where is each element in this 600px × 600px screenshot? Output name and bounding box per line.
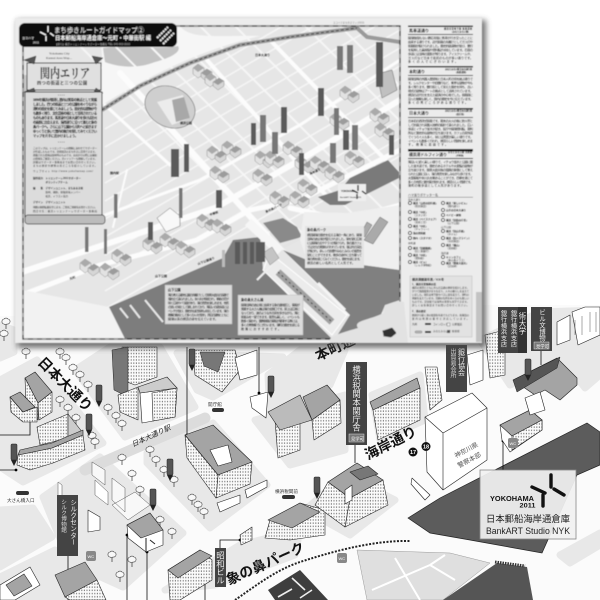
section: 本町通り: 開港当時の外国人居留地と日本人町の境を結ぶ通りで <box>408 76 473 81</box>
callout: 山下公園: 埋め立て造られました。氷川丸が係留され、季節の花が <box>168 296 230 301</box>
building: annex behind corner <box>37 414 83 445</box>
label: 横浜銀行協会: 出貿易会所 <box>449 347 456 379</box>
section: legend list: （関内通り） <box>446 204 461 208</box>
section: 日本大通り: (県庁前) <box>456 112 464 116</box>
sky clouds behind rail <box>100 26 260 105</box>
panel: area map <box>22 0 400 339</box>
panel: tram history box: 凡例 <box>412 322 418 326</box>
English map caption: Yokohama City <box>49 52 70 56</box>
label: 神奈川県警察本部 <box>453 440 483 470</box>
callout: 山下公園: 海の見える都市公園の先駆けとして関東大震災の瓦礫で <box>168 292 229 297</box>
organiser note: このマップは、トリエンナーレの開催にあわせてサポーター <box>33 146 97 150</box>
section: legend list: （県民施設） <box>413 204 428 208</box>
docks <box>268 570 328 600</box>
panel: tram history box: 公衆電話 <box>452 322 463 326</box>
callout: 象の鼻大さん橋: 開港当時の波止場に由来する象の鼻地区と、客船が <box>241 302 301 307</box>
logo: header spokes <box>40 26 54 41</box>
label: 横浜税関本関庁舎: 見学可 <box>351 436 365 442</box>
building: NYK warehouse <box>513 357 577 415</box>
section: legend list: 横浜「旧街の庁舎」 <box>446 218 469 222</box>
intro paragraph: の面影に出会えます。海岸通りに沿って進むと象の <box>33 120 97 124</box>
map ground <box>24 46 25 47</box>
callout: 象の鼻パーク: 象の鼻パーク <box>307 227 326 232</box>
section: legend list: （旧三菱銀行） <box>413 249 431 253</box>
section: legend list: 横浜（旧ハマライン） <box>446 236 471 240</box>
section: legend list: 横浜「旧山手館」 <box>446 229 466 233</box>
section: legend list: 海の資料館 <box>413 231 426 235</box>
callout: YOKOHAMA 2011 BankART Studio NYK <box>480 470 576 539</box>
section: legend list: 横浜「旧館飯館」 <box>413 246 433 250</box>
left water <box>109 237 332 339</box>
intro paragraph <box>33 97 98 138</box>
section: legend list: （記念碑） <box>446 264 459 268</box>
label: シルクセンター シルク博物館: シルク博物館 <box>60 499 67 534</box>
park land <box>300 205 400 270</box>
subheading: route: 日本郵船海岸通倉庫〜元町・中華街駅 編 <box>55 34 152 42</box>
callout: 象の鼻大さん橋: 象の鼻大さん橋 <box>241 297 264 302</box>
panel: street descriptions <box>408 26 474 337</box>
building: tall tower group <box>112 347 177 423</box>
section: 馬車道通り: 街路樹が設けられました。歴史的建造物が並び、銀行 <box>408 43 473 48</box>
area labels: 関内駅 <box>110 170 119 175</box>
section: 山下公園通り: (中華街) <box>456 154 464 158</box>
label: 銀行 横浜支店 <box>498 307 527 353</box>
section: legend list: 横浜「関東大震災」 <box>446 261 469 265</box>
panel: tram history box: いました。現在は地下鉄やバスに姿を変えて、港町の <box>412 292 469 296</box>
organiser note <box>33 146 97 173</box>
building: small silk block <box>58 462 163 552</box>
section: 馬車道通り <box>408 26 473 64</box>
callout: 象の鼻大さん橋 <box>238 295 303 335</box>
panel: title scroll <box>24 56 103 96</box>
logo text: 2011: 2011 <box>520 502 536 510</box>
label: ビル 見学可: ビル文博物館 <box>538 309 545 349</box>
panel: tram history box: 2．港の歴史 <box>412 309 426 313</box>
section: 馬車道通り: を転用した美術館や資料館が点在しています。石畳の <box>408 47 473 52</box>
callout: 象の鼻パーク: では文化の発信も行われています。夜は光の演出 <box>307 244 362 249</box>
credits: 編 集 デザインユニット、まちあるき班 <box>33 186 83 190</box>
section: 本町通り: 様式の建物はアートの拠点として活用されています。 <box>408 88 473 93</box>
building clusters <box>80 64 397 280</box>
building: customs house <box>315 463 430 527</box>
panel: introduction scroll: • • • • <box>58 140 65 144</box>
section: legend list: ハマ巡りポケッター名 <box>408 192 438 197</box>
organiser note: まちの歴史や建物の見どころを紹介しています。 <box>33 164 97 168</box>
subtitle: 四つの街道と三つの公園: 四つの街道と三つの公園 <box>37 80 87 86</box>
route number 17 <box>408 448 418 456</box>
WC tags <box>86 438 518 563</box>
section: legend list: （山下公園） <box>446 221 461 225</box>
small label: 大さん橋入口: 大さん橋入口 <box>7 497 35 504</box>
section: legend list: 横浜「中区」 <box>413 253 428 257</box>
leader lines <box>0 347 541 600</box>
label: 横浜税関本関庁舎: 横浜税関本関庁舎 <box>352 364 362 432</box>
section: 日本大通り: イベントも数多く行われ、横浜らしい景観を楽しめま <box>408 138 473 143</box>
panel: tram history box: みなとみらい線 <box>433 329 451 333</box>
inner water <box>443 563 533 600</box>
scroll roll <box>25 215 105 224</box>
section: legend list: （ホテル） <box>446 232 459 236</box>
guide map sheet <box>15 0 482 343</box>
moored ships <box>120 300 163 322</box>
section: 馬車道通り: 由来する通りです。近代街路の先駆けとしてガス灯や <box>408 39 473 44</box>
section: 山下公園通り <box>408 149 474 188</box>
callout: 象の鼻大さん橋: 街並みを一望できます。夜景も美しく、イベントも <box>241 314 300 319</box>
intro paragraph: 1859年横浜が開港し関内は貿易の拠点として発展 <box>33 97 98 102</box>
credits: ボランティアチーム <box>33 180 68 184</box>
section: 山下公園通り: られた公園に沿い、港の風景を楽しみながら歩けます。 <box>408 171 473 176</box>
section: 本町通り: 横浜の近代化を支えた経済の中心地でした。街路樹に <box>408 92 473 97</box>
BankART mini logo box: YOKOHAMA <box>341 190 355 193</box>
trees <box>0 318 208 582</box>
small label: 横浜税関前 <box>275 488 298 499</box>
building: warehouse annex <box>500 410 542 452</box>
section: 本町通り: 本町通り <box>409 68 425 74</box>
section: 馬車道通り: 横浜市営地下鉄 馬車道駅 <box>444 26 473 30</box>
credits <box>33 176 97 213</box>
section: legend list: ベイビー建物 <box>446 213 462 217</box>
credits: デザイン デザインユニット <box>33 200 66 204</box>
section: legend list: 横浜（ベイスクエア） <box>413 217 438 221</box>
section: legend list: 横浜（ビル） <box>413 260 428 264</box>
streets <box>22 40 400 295</box>
small label: 大さん橋入口 <box>7 491 35 504</box>
building: long office <box>370 367 442 440</box>
callout: 象の鼻パーク: 当時の波止場が復元されました。港を望む広場 <box>307 236 362 241</box>
area labels: 海岸通り <box>308 166 321 176</box>
harbour water <box>408 423 600 553</box>
panel: tram history box: コインロッカー <box>433 322 451 326</box>
English map caption: Kannai Area Map... <box>46 56 72 60</box>
label: 術大学: 術大学 <box>518 312 527 334</box>
section: 日本大通り: して計画され英国人技師の設計で造られました。広い <box>408 122 473 127</box>
name: 日本郵船海岸通倉庫: 日本郵船海岸通倉庫 <box>486 513 570 524</box>
label: 神奈川県警察本部: 警察本部 <box>456 450 483 470</box>
日本大通り駅 band <box>85 418 205 470</box>
WC tags: WC <box>88 554 94 559</box>
label: 昭和ビル: 昭和ビル <box>216 551 226 585</box>
section: 馬車道通り: 多くの人でにぎわいます。 <box>408 58 458 64</box>
intro paragraph: ゆっくりと歩いて関内の魅力を探してみてください <box>33 128 97 134</box>
panel: tram history box: 横浜の港湾とともに歩んだ交通の歴史を紹介します。 <box>412 286 469 290</box>
long park buildings <box>360 217 388 244</box>
section: 本町通り: みなとみらい線 日本大通り駅 <box>445 67 473 71</box>
building: 昭和ビル group <box>168 503 325 600</box>
pins <box>11 349 531 511</box>
title: 関内エリア: 関内エリア <box>40 66 90 81</box>
station label: 日本大通り駅: 日本大通り駅 <box>130 423 173 449</box>
label: 銀行 横浜支店: 銀行横浜支店 <box>510 309 517 348</box>
callout: 象の鼻大さん橋: 数多く開かれ、国際航路の客船が寄港する際には、 <box>241 318 300 323</box>
section: legend list: 横浜「中区」 <box>413 210 428 214</box>
section: legend list <box>408 192 473 268</box>
area labels: 山下公園通り <box>197 255 215 266</box>
section: 本町通り: (馬車道駅) <box>456 70 466 74</box>
section: 本町通り: す。シルクセンターや旧銀行など、重厚な建物が今も <box>408 80 473 85</box>
road label: 海岸通り: 海岸通り <box>362 423 419 463</box>
park <box>357 550 490 600</box>
section: legend list: 山手の日本大通り <box>446 208 467 212</box>
intro paragraph: 港町の歴史を感じてみましょう。歴史的な建物が今 <box>33 106 98 111</box>
panel shadow <box>17 20 486 348</box>
callout: 象の鼻パーク: には開港の丘やテラスが設けられ、象の鼻カフェ <box>307 240 362 245</box>
header bar <box>19 23 177 47</box>
organiser note: 掲載された情報は取材時のものです。お出かけの際には最新 <box>33 153 97 157</box>
section: 馬車道通り: ガス灯など日本で最初のものが多い通りです。 <box>408 55 473 60</box>
small label: 開庁館: 開庁館 <box>208 401 222 408</box>
building: dark ornate block <box>193 350 257 392</box>
callout: 山下公園: 咲く広場やバラ園があり、港の景色を楽しめます。市民 <box>168 300 229 305</box>
logo text: YOKOHAMA: YOKOHAMA <box>490 496 534 503</box>
callout: 山下公園: ベンチが並び、歴史的な記念碑も点在しています。港の <box>168 308 229 313</box>
sheet paper <box>15 18 482 343</box>
area labels <box>69 52 321 281</box>
callout: 象の鼻大さん橋: 多くの見物客でにぎわいます。港町の歴史を感じる <box>241 322 300 327</box>
intro paragraph: 鼻パークへ。さらに山下公園から元町へと続きます <box>33 124 97 129</box>
section: 日本大通り: す。散策に最適です。 <box>408 142 448 146</box>
publisher line: 【発行】横浜トリエンナーレサポーター事務局 TEL.045-663-0000 <box>55 42 131 46</box>
section: 日本大通り: 日本初の西洋式街路です。幕末の大火の後に防火帯と <box>408 118 473 123</box>
heading: まち歩きルートガイドマップ②: まち歩きルートガイドマップ② <box>54 26 144 34</box>
building: police headquarters <box>425 393 487 490</box>
logo: YOKOHAMA 2011 spokes <box>532 475 564 506</box>
intro paragraph: ものもあります。馬車道や日本大通りを歩けば近代 <box>33 115 98 120</box>
right edge shading <box>476 292 482 342</box>
cloud overlapping frame corner <box>329 301 408 343</box>
label: 横浜税関本関庁舎 <box>346 362 367 445</box>
map ground <box>0 305 600 600</box>
road label: 本町通り: 本町通り <box>313 326 370 364</box>
panel: tram history box: かつて路面電車がまちを走り、人々の暮らしを支えて <box>412 289 469 293</box>
section: 山下公園通り: 多くの市民と観光客が訪れます。横浜らしい景観です。 <box>408 179 473 184</box>
label: ビル 見学可 <box>531 307 552 351</box>
road label: 象の鼻パーク: 象の鼻パーク <box>224 539 307 588</box>
credits: 取材、撮影、原稿担当メンバー <box>33 190 81 194</box>
label: ビル 見学可: 見学可 <box>536 343 550 350</box>
bridge <box>495 562 525 566</box>
section: legend list: 横浜「山形の旧行館」 <box>413 201 438 205</box>
stadium <box>144 85 196 129</box>
label: 横浜銀行協会: 銀行協会 <box>458 347 465 377</box>
route number 18: 18 <box>423 444 429 450</box>
building: curved corner block <box>17 430 85 470</box>
icon: striped map badge <box>157 27 174 44</box>
section: 本町通り: 多く残ります。銀行街として栄えた歴史を持ち、古い <box>408 84 473 89</box>
area labels: 山下公園 <box>155 273 167 278</box>
panel: tram history box: 開港から続く港の役割を年表でたどります。各施設の <box>412 313 469 317</box>
section: legend list: （スタジオ） <box>413 213 428 217</box>
logo text: ヨコハマ <box>22 35 34 40</box>
credits: 校正、イラスト協力 <box>33 194 68 198</box>
section: 山下公園通り: 海沿いに続く美しい通りで、イチョウ並木と公園に面 <box>408 159 473 164</box>
callout: 象の鼻パーク <box>305 226 364 268</box>
area labels: 日本大通り <box>255 52 270 57</box>
section: legend list: 山下公園 <box>441 225 452 229</box>
panel: tram history box: 発展を支えています。沿線の名所をめぐるのも楽しい <box>412 296 469 300</box>
header bar: 2011 <box>33 40 40 44</box>
waterfront fence <box>235 541 410 600</box>
panel: tram history box <box>410 276 472 337</box>
section: 本町通り <box>408 66 473 104</box>
section: 山下公園通り: した並木道です。歴史のあるホテルや大使館の建物が <box>408 163 474 168</box>
area labels: 横浜公園 <box>180 120 192 125</box>
intro paragraph: マップを片手に出かけましょう。 <box>33 133 78 138</box>
section: 日本大通り: 日本大通り <box>409 110 429 116</box>
section: legend list: （資料館） <box>413 256 426 260</box>
elevated railway <box>102 28 400 110</box>
building: narrow block <box>485 330 505 378</box>
credits: 地図の無断転載を禁じます。ご意見ご感想をお寄せください。 <box>33 205 97 209</box>
section: 本町通り: 多くの見どころがある通りです。 <box>408 100 468 104</box>
WC tags: WC <box>338 556 345 561</box>
lower enlarged street map <box>0 305 600 600</box>
section: legend list: 日本大通り <box>408 198 421 202</box>
area labels: 中華街 <box>209 209 219 217</box>
English map caption <box>46 52 72 60</box>
organiser note: が作成したものです。会場周辺のまち歩きに活用できます。 <box>33 150 97 154</box>
callout: 象の鼻大さん橋: 散策におすすめです。 <box>241 326 281 331</box>
small label: 横浜税関前: 横浜税関前 <box>275 488 298 495</box>
callout: 山下公園: 散策の拠点として多くの人々が訪れ、周辺の建物とともに <box>168 312 229 317</box>
section: 山下公園通り: 立ち並びます。関東大震災後の復興の象徴として整え <box>408 167 473 172</box>
callout: 山下公園 <box>165 285 232 324</box>
section: 馬車道通り: 歩道には当時の面影が残ります。アイスクリームや、 <box>408 51 473 56</box>
building: left warehouse <box>10 372 52 422</box>
section: 日本大通り: みなとみらい線 日本大通り駅 <box>445 108 473 112</box>
callout: 象の鼻大さん橋: 発着する大さん橋は港の玄関口です。屋上は広場に <box>241 306 300 311</box>
callout: 象の鼻パーク: が施され、赤レンガ倉庫やみなとみらいの夜景を <box>307 248 362 253</box>
label: 術大学 <box>518 307 527 353</box>
callout: 象の鼻パーク: 港の風を感じてみてください。歴史を感じます。 <box>307 256 362 261</box>
section: legend list: 本町通 <box>408 241 416 245</box>
intro paragraph: も数多く残り、文化芸術の場として活用されている <box>33 110 97 116</box>
WC tags: WC <box>510 441 516 446</box>
callout: 象の鼻パーク: 横浜の新しい名所として人気です。 <box>307 260 355 265</box>
section: legend list: 横浜「横山」 <box>446 243 461 247</box>
panel: introduction scroll <box>25 92 102 217</box>
section: 日本大通り: 歩道とイチョウ並木が続き、県庁や開港資料館、裁判 <box>408 126 473 131</box>
credits: 問合せ先：横浜トリエンナーレサポーター事務局 <box>33 209 97 213</box>
callout: 山下公園: 開港以来の横浜の姿を伝えています。 <box>168 316 218 321</box>
BankART mini logo box <box>338 184 366 201</box>
section: legend list: （美術工芸） <box>413 220 428 224</box>
section: 馬車道通り: (みなとみらい線) <box>452 30 469 34</box>
section: legend list: （象の鼻テラス） <box>446 258 466 262</box>
map frame <box>23 26 400 339</box>
panel: tram history box: 駐車場 <box>452 329 460 333</box>
section: legend list: （市民施設） <box>446 239 461 243</box>
callout: 象の鼻パーク: 横浜開港の歴史を伝える港の一角にあり、開港 <box>307 232 363 237</box>
pier <box>248 222 347 335</box>
callout: 象の鼻大さん橋: なっており、波のような木の床を歩きながら、海と <box>241 310 300 315</box>
section: legend list: 横浜「中区」 <box>413 224 428 228</box>
label: 銀行 横浜支店: 銀行横浜支店 <box>500 309 507 348</box>
section: legend list: （ギャラリー） <box>413 227 431 231</box>
section: legend list: 海岸通 <box>441 251 449 255</box>
right water <box>283 250 400 339</box>
section: 本町通り: 沿った散策も楽しく、関内の歴史を今に伝えています。 <box>408 96 473 101</box>
name: BankART Studio NYK: BankART Studio NYK <box>486 526 571 537</box>
panel: tram history box: 横浜港関連年表／ICE号 <box>412 276 444 282</box>
buildings: upper right row <box>467 307 600 385</box>
route number 18 <box>422 442 430 451</box>
organiser note: 詳細はサポーター事務局までお問い合わせください。 <box>33 160 97 164</box>
dock basin <box>263 218 302 243</box>
panel: tram history box: 1．横浜市営路線の話 <box>412 282 436 286</box>
harbour water <box>318 160 399 205</box>
lower left land <box>23 290 125 339</box>
section: 日本大通り: でくつろぐ人も多く、秋には黄葉が美しい通りです。 <box>408 134 473 139</box>
section: 馬車道通り: 開港後間もない慶応年間に馬車が行き交ったことに <box>408 35 473 40</box>
section: legend list: （美術館） <box>446 246 459 250</box>
section: 日本大通り <box>408 108 473 146</box>
area labels: 象の鼻パーク <box>264 202 283 214</box>
area labels: 元町 <box>69 275 76 281</box>
vertical name labels <box>85 42 394 267</box>
small label: 開庁館 <box>208 401 224 412</box>
panel: tram history box: 詳しくは各施設までお問い合わせください。 <box>412 303 469 307</box>
organiser note: の情報をご確認ください。ガイドツアーも開催しています。 <box>33 156 97 160</box>
building: bottom-left blocks <box>0 562 106 600</box>
callout: 山下公園: 山下公園 <box>168 287 181 292</box>
callout: 山下公園: の憩いの場として親しまれており、海沿いの遊歩道には <box>168 304 229 309</box>
city blocks <box>0 310 600 600</box>
organiser note: ウェブサイト http://www.yokohamap.com/ <box>33 169 93 173</box>
callout: 象の鼻パーク: 望むことができます。散歩の途中に立ち寄って <box>307 252 362 257</box>
route number 17: 17 <box>410 450 416 456</box>
label: シルクセンター シルク博物館: シルクセンター <box>68 499 77 545</box>
icon: seal mark in bay <box>383 328 396 337</box>
panel: tram history box: 案内は地図の番号と対応しています。 <box>412 316 469 320</box>
section: legend list: キリンカフェ <box>446 255 462 259</box>
section: 山下公園通り: 横浜港ドルフィン通り <box>409 152 447 157</box>
fine grid streets <box>80 26 400 316</box>
section: legend list: 横浜「美しいビル」 <box>446 201 469 205</box>
intro paragraph: しました。四つの街道と三つの公園をめぐりながら <box>33 102 97 106</box>
building: prefectural office <box>185 425 267 512</box>
label: 横浜銀行協会 <box>446 345 467 392</box>
panel: tram history box: ものです。記念館では当時の車両も見学できます。 <box>412 300 469 304</box>
section: 日本大通り: 所など歴史的な建物が立ち並びます。カフェの屋外席 <box>408 130 473 135</box>
section: legend list: 関内（スタジオ） <box>413 236 433 240</box>
section: legend list: （シルク博物館） <box>413 263 433 267</box>
section: 馬車道通り: 馬車道通り <box>409 27 429 33</box>
BankART mini logo box: BankART Studio NYK <box>340 196 362 199</box>
breakwater <box>299 237 300 238</box>
credits: 製作協力 トリエンナーレ2011サポーター <box>33 176 81 180</box>
panel: introduction scroll: • • • • <box>58 93 65 97</box>
section: 山下公園通り: みなとみらい線 元町駅 <box>448 150 473 154</box>
section: 山下公園通り: 大型客船や氷川丸を眺めることができ、四季を通じて <box>408 175 473 180</box>
building: centre office <box>250 385 341 458</box>
label: 神奈川県警察本部: 神奈川県 <box>453 440 480 460</box>
label: シルクセンター シルク博物館 <box>57 495 78 556</box>
top ruler note: ヨコハマまち歩きマップ2011 <box>333 20 365 24</box>
section: 山下公園通り: 港町の散歩道として人気があります。 <box>408 182 463 188</box>
road label: 日本大通り: 日本大通り <box>35 354 96 415</box>
